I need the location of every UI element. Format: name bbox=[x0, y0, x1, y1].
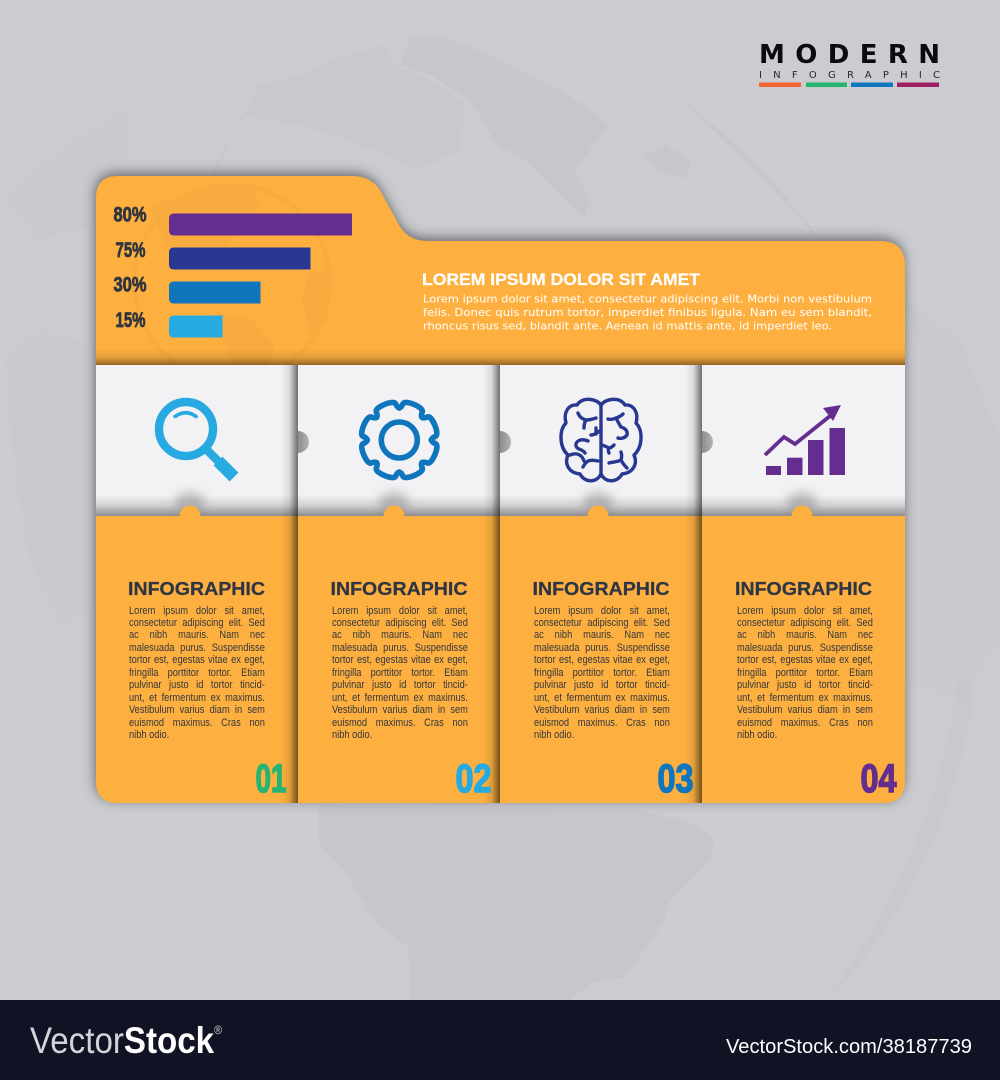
logo: modern infographic: MODERN bbox=[759, 40, 940, 70]
panel: column 2 bbox=[298, 506, 500, 803]
column 2 text: pulvinar justo id tortor tincid- bbox=[332, 679, 467, 691]
column 1 text: unt, et fermentum ex maximus. bbox=[129, 692, 265, 704]
column 2 text: nibh odio. bbox=[332, 729, 372, 741]
header bottom shadow bbox=[96, 348, 905, 365]
column 1 text: fringilla porttitor tortor. Etiam bbox=[129, 667, 265, 679]
column 1 text: nibh odio. bbox=[129, 729, 169, 741]
card shadow bbox=[95, 173, 904, 800]
column 4 text: fringilla porttitor tortor. Etiam bbox=[736, 667, 872, 679]
column 2 text: consectetur adipiscing elit. Sed bbox=[332, 617, 467, 629]
column 4 text: pulvinar justo id tortor tincid- bbox=[736, 679, 872, 691]
column 2 text bbox=[332, 604, 468, 750]
bar chart bbox=[114, 204, 352, 338]
bar: 30% bbox=[169, 282, 260, 304]
panel: icon row bbox=[96, 365, 905, 516]
column 1 text: pulvinar justo id tortor tincid- bbox=[129, 679, 265, 691]
column 2 text: euismod maximus. Cras non bbox=[332, 717, 467, 729]
panel: column 3 bbox=[500, 506, 702, 803]
column 1 text bbox=[129, 604, 266, 750]
column 1 text: Lorem ipsum dolor sit amet, bbox=[129, 604, 265, 616]
column 4 text: ac nibh mauris. Nam nec bbox=[736, 629, 872, 641]
column 4 text: tortor est, egestas vitae ex eget, bbox=[736, 654, 872, 666]
column 2 number: 02 bbox=[456, 757, 492, 801]
column 3 number: 03 bbox=[658, 757, 694, 801]
bar label: 80%: 80% bbox=[114, 204, 147, 226]
column 3 text: consectetur adipiscing elit. Sed bbox=[534, 617, 670, 629]
column 1 text: ac nibh mauris. Nam nec bbox=[129, 629, 265, 641]
header text: Lorem ipsum dolor sit amet, consectetur adipiscing elit. Morbi non vestibulum bbox=[423, 292, 872, 306]
bar label: 30%: 30% bbox=[114, 274, 147, 296]
column 4 text: malesuada purus. Suspendisse bbox=[736, 642, 872, 654]
column 4 text: nibh odio. bbox=[736, 729, 777, 741]
panel: column 1 bbox=[96, 506, 298, 803]
icon: growth chart bbox=[765, 405, 845, 475]
column 4 heading: INFOGRAPHIC bbox=[735, 578, 872, 599]
column 2 text: tortor est, egestas vitae ex eget, bbox=[332, 654, 467, 666]
bar label: 75%: 75% bbox=[116, 239, 146, 262]
column 2 heading: INFOGRAPHIC bbox=[330, 578, 468, 599]
bar: 75% bbox=[169, 248, 310, 270]
column 2 text: fringilla porttitor tortor. Etiam bbox=[332, 667, 467, 679]
panel: column 4 bbox=[702, 506, 905, 803]
column 2 text: unt, et fermentum ex maximus. bbox=[332, 692, 467, 704]
column 1 text: malesuada purus. Suspendisse bbox=[129, 642, 265, 654]
footer bar bbox=[0, 1000, 1000, 1080]
column 4 text bbox=[736, 604, 874, 750]
logo: modern infographic: INFOGRAPHIC bbox=[759, 70, 940, 81]
column 1 number: 01 bbox=[256, 757, 286, 801]
column 3 text: Lorem ipsum dolor sit amet, bbox=[534, 604, 670, 616]
footer url: VectorStock.com/38187739 bbox=[726, 1036, 972, 1058]
column 3 text bbox=[534, 604, 671, 750]
column 3 text: ac nibh mauris. Nam nec bbox=[534, 629, 670, 641]
column 3 text: Vestibulum varius diam in sem bbox=[534, 704, 670, 716]
panel: folder header bbox=[96, 176, 905, 383]
column 1 text: Vestibulum varius diam in sem bbox=[129, 704, 265, 716]
column 3 text: euismod maximus. Cras non bbox=[534, 717, 670, 729]
column 2 text: Lorem ipsum dolor sit amet, bbox=[332, 604, 467, 616]
column 3 heading: INFOGRAPHIC bbox=[532, 578, 670, 599]
column 3 text: unt, et fermentum ex maximus. bbox=[534, 692, 670, 704]
column 1 text: consectetur adipiscing elit. Sed bbox=[129, 617, 265, 629]
column 1 text: tortor est, egestas vitae ex eget, bbox=[129, 654, 265, 666]
column 2 text: malesuada purus. Suspendisse bbox=[332, 642, 467, 654]
column 3 text: malesuada purus. Suspendisse bbox=[534, 642, 670, 654]
column 3 text: nibh odio. bbox=[534, 729, 574, 741]
header text: rhoncus risus sed, blandit ante. Aenean id mattis ante, id imperdiet leo. bbox=[423, 320, 832, 332]
column 4 text: Lorem ipsum dolor sit amet, bbox=[736, 604, 872, 616]
column 1 text: euismod maximus. Cras non bbox=[129, 717, 265, 729]
column 3 text: tortor est, egestas vitae ex eget, bbox=[534, 654, 670, 666]
footer logo: VectorStock bbox=[30, 1020, 225, 1061]
bar label: 15%: 15% bbox=[116, 309, 146, 332]
header title: LOREM IPSUM DOLOR SIT AMET bbox=[422, 271, 700, 289]
header text: felis. Donec quis rutrum tortor, imperdiet finibus ligula. Nam eu sem blandit, bbox=[423, 306, 872, 319]
column 4 text: Vestibulum varius diam in sem bbox=[736, 704, 872, 716]
column 2 text: ac nibh mauris. Nam nec bbox=[332, 629, 467, 641]
column 3 text: fringilla porttitor tortor. Etiam bbox=[534, 667, 670, 679]
icon: gear bbox=[359, 400, 440, 480]
column 4 number: 04 bbox=[860, 757, 897, 801]
column 2 text: Vestibulum varius diam in sem bbox=[332, 704, 467, 716]
bar: 80% bbox=[169, 214, 352, 236]
icon: magnifying glass bbox=[159, 402, 234, 477]
footer logo: ® bbox=[214, 1023, 222, 1037]
logo: modern infographic bbox=[759, 40, 940, 87]
bar: 15% bbox=[169, 316, 222, 338]
header text bbox=[423, 292, 872, 332]
column 4 text: euismod maximus. Cras non bbox=[736, 717, 872, 729]
column 1 heading: INFOGRAPHIC bbox=[128, 578, 265, 599]
icon: brain bbox=[561, 399, 641, 481]
column 4 text: unt, et fermentum ex maximus. bbox=[736, 692, 872, 704]
globe watermark bbox=[132, 183, 332, 383]
column 3 text: pulvinar justo id tortor tincid- bbox=[534, 679, 670, 691]
column 4 text: consectetur adipiscing elit. Sed bbox=[736, 617, 872, 629]
